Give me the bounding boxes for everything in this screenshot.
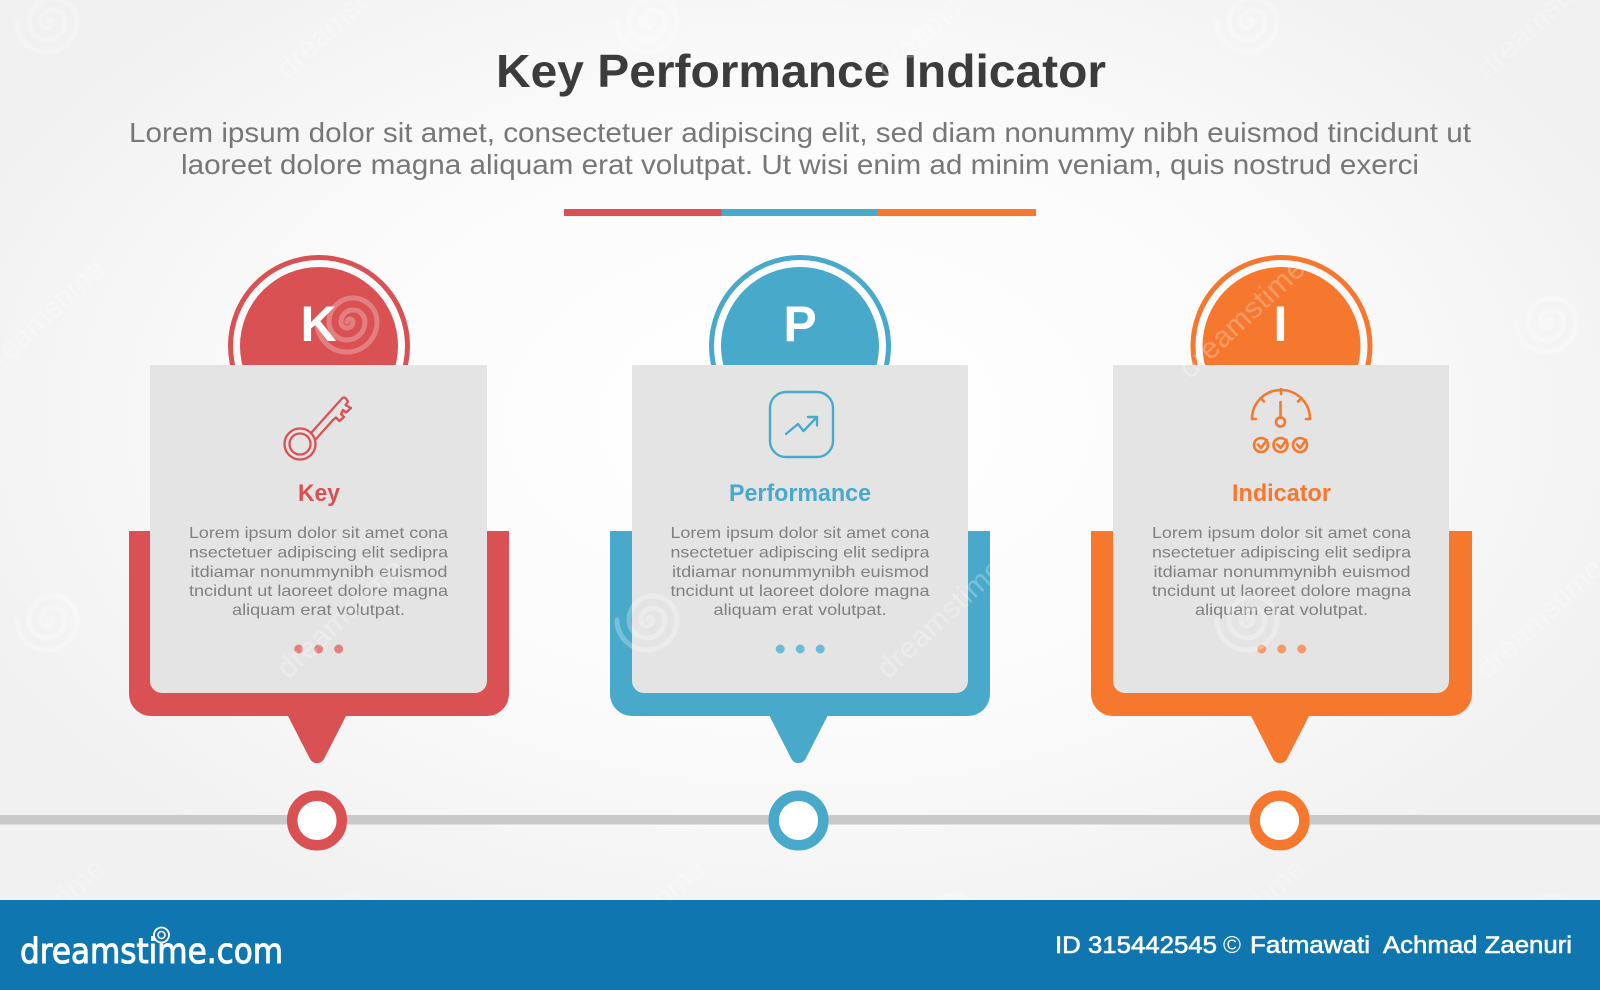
panel: Key: [129, 258, 509, 845]
dots: [294, 644, 343, 654]
description: nsectetuer adipiscing elit sedipra: [189, 544, 448, 562]
subtitle: laoreet dolore magna aliquam erat volutpat. Ut wisi enim ad minim veniam, quis nostrud exerci: [181, 149, 1419, 180]
description: Lorem ipsum dolor sit amet cona: [189, 525, 448, 542]
frame with pointer: [129, 531, 509, 763]
description: itdiamar nonummynibh euismod: [190, 564, 448, 581]
P badge: [712, 258, 888, 434]
heading: Indicator: Indicator: [1232, 480, 1331, 507]
subtitle: Lorem ipsum dolor sit amet, consectetuer adipiscing elit, sed diam nonummy nibh euismod tincidunt ut: [129, 117, 1471, 148]
footer credit: ©: [1223, 932, 1241, 959]
footer logo: dreamstime.com: [20, 932, 283, 972]
frame with pointer: [1091, 531, 1472, 763]
timeline line: [0, 815, 1600, 824]
watermark overlay: dreamstime: [1172, 852, 1312, 985]
card: [632, 365, 968, 693]
footer credit: ID 315442545: [1055, 932, 1217, 959]
panel: Indicator: [1091, 258, 1472, 845]
I badge: I: [1274, 296, 1287, 352]
description: itdiamar nonummynibh euismod: [1154, 564, 1410, 581]
description: itdiamar nonummynibh euismod: [672, 564, 929, 581]
description: tncidunt ut laoreet dolore magna: [189, 583, 448, 600]
K badge: [230, 258, 408, 434]
heading: Key: Key: [298, 480, 341, 507]
timeline marker: [292, 796, 342, 845]
frame with pointer: [610, 531, 990, 763]
K badge: K: [300, 296, 337, 352]
footer bar: [0, 900, 1600, 990]
footer credit: Fatmawati: [1250, 932, 1370, 959]
description: Lorem ipsum dolor sit amet cona: [1152, 525, 1411, 542]
watermark overlay: dreamstime: [1172, 252, 1312, 385]
card: [1113, 365, 1449, 693]
description: tncidunt ut laoreet dolore magna: [1152, 583, 1411, 600]
subtitle: [129, 117, 1471, 180]
description: aliquam erat volutpat.: [232, 602, 405, 619]
heading: Performance: Performance: [729, 480, 871, 507]
I badge: [1193, 258, 1370, 434]
timeline marker: [774, 796, 823, 845]
watermark overlay: dreamstime: [870, 552, 1010, 685]
panel: Performance: [610, 258, 990, 845]
P badge: P: [783, 296, 817, 352]
card: [150, 365, 487, 693]
title: Key Performance Indicator: [496, 45, 1106, 97]
watermark overlay: dreamstime: [572, 852, 712, 985]
footer credit: [1055, 932, 1572, 959]
description: [670, 525, 930, 619]
footer credit: Achmad Zaenuri: [1383, 932, 1572, 959]
description: [189, 525, 448, 619]
icon: key: [284, 398, 351, 460]
description: nsectetuer adipiscing elit sedipra: [1152, 544, 1411, 562]
description: aliquam erat volutpat.: [1195, 602, 1368, 619]
dots: [776, 644, 825, 654]
description: aliquam erat volutpat.: [714, 602, 886, 619]
icon: growth chart: [770, 392, 833, 457]
watermark overlay: dreamstime: [270, 552, 410, 685]
timeline marker: [1255, 796, 1304, 845]
description: [1152, 525, 1411, 619]
description: Lorem ipsum dolor sit amet cona: [670, 525, 930, 542]
dots: [1257, 644, 1306, 654]
watermark overlay: dreamstime: [572, 252, 712, 385]
icon: gauge with checks: [1252, 389, 1310, 452]
description: tncidunt ut laoreet dolore magna: [670, 583, 930, 600]
description: nsectetuer adipiscing elit sedipra: [670, 544, 930, 562]
tricolor divider: [564, 209, 1036, 216]
